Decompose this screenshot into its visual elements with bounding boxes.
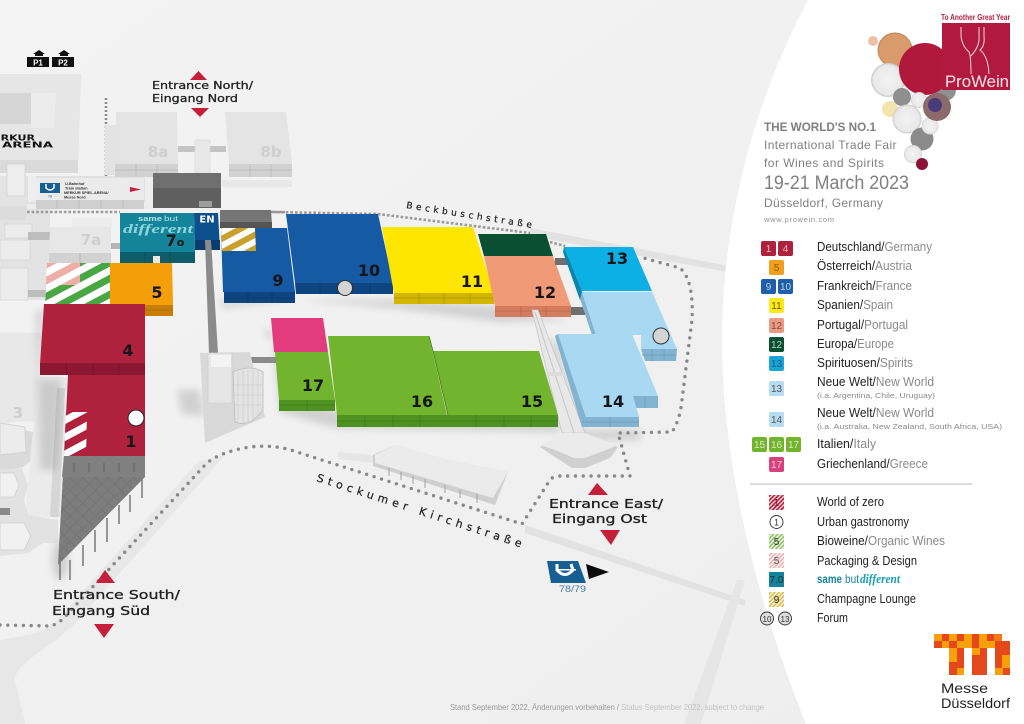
ProWein logo: ProWein — [945, 72, 1009, 91]
entrance north label: Eingang Nord — [152, 92, 238, 105]
legend row: Austria: Österreich/Austria — [817, 259, 912, 273]
canopy — [52, 456, 145, 580]
entrance south label: Entrance South/ — [53, 588, 181, 602]
legend row: World of zero: 1 — [774, 498, 780, 509]
legend row: Europe — [769, 337, 894, 352]
hall: 12 — [484, 256, 571, 317]
legend row: Portugal — [769, 318, 908, 333]
entrance east label: Eingang Ost — [552, 512, 647, 526]
street name: Stockumer Kirch strasse: Stockumer Kirchstraße — [315, 471, 524, 550]
legend row: Champagne Lounge: 9 — [774, 595, 780, 606]
hall: 8b — [225, 112, 292, 177]
dotted visitor paths — [0, 257, 692, 626]
walkway to entrance east — [532, 310, 585, 433]
legend row: New World 14: (i.a. Australia, New Zealand, South Africa, USA) — [817, 422, 1003, 431]
connector tower to hall 17 — [250, 357, 276, 363]
hall: EN — [194, 213, 220, 250]
ProWein logo: To Another Great Year — [941, 13, 1010, 22]
marker: urban gastronomy — [128, 410, 144, 426]
entrance north label: Entrance North/ — [152, 79, 253, 92]
Messe Duesseldorf logo — [934, 634, 1010, 711]
ProWein logo — [868, 13, 1010, 170]
legend row: Forum: Forum — [817, 611, 848, 625]
legend row: Austria: 5 — [774, 263, 780, 274]
champagne lounge stripes — [221, 228, 256, 251]
hall: 14 — [555, 334, 658, 427]
legend row: World of zero — [769, 495, 884, 510]
legend row: World of zero: World of zero — [817, 495, 884, 509]
legend row: Italy: Italien/Italy — [817, 437, 877, 451]
legend row: Organic wines: Bioweine/Organic Wines — [817, 534, 945, 548]
legend row: Germany: 1 — [766, 244, 772, 255]
connector from EN to tower — [205, 240, 218, 353]
hall: 11 — [382, 227, 494, 304]
hall: 17 greece — [271, 318, 328, 352]
trade fair heading: Düsseldorf, Germany — [764, 196, 883, 210]
hall: 4: 4 — [122, 341, 134, 360]
building: U-Bahn station — [27, 175, 153, 209]
legend row: same but different: different — [860, 571, 900, 586]
hall: 10: 10 — [358, 261, 380, 280]
icon: U-Bahn sign small: 78 — [48, 194, 52, 198]
entrance south label: Eingang Süd — [52, 604, 150, 618]
tower building — [200, 352, 265, 443]
legend row: France: 9 — [766, 282, 772, 293]
hall: 17: 17 — [302, 376, 324, 395]
dotted fence north — [27, 212, 565, 246]
legend row: New World 13 — [769, 375, 936, 400]
legend row: New World 13: 13 — [771, 384, 782, 395]
hall: 12: 12 — [534, 283, 556, 302]
Messe Duesseldorf logo: Düsseldorf — [941, 695, 1010, 711]
legend row: same but different: but — [845, 572, 860, 586]
hall: 10 — [286, 214, 393, 296]
legend row: New World 14 — [769, 406, 1003, 431]
roads — [0, 228, 750, 724]
legend row: Organic wines — [769, 534, 945, 549]
hall: 7.0 same but different — [120, 213, 195, 264]
parking icons: P2 — [58, 58, 68, 68]
station text: Tram station — [65, 186, 88, 190]
hall: europe — [478, 234, 553, 256]
same but different lettering: same — [138, 214, 162, 223]
building: Merkur Spiel-Arena: ARENA — [2, 140, 53, 150]
legend row: Germany: Deutschland/Germany — [817, 240, 933, 254]
legend row: same but different — [769, 571, 900, 587]
legend row: Packaging and Design: Packaging & Design — [817, 554, 917, 568]
hall: 8a — [105, 112, 178, 177]
legend row: Portugal: 12 — [771, 321, 782, 332]
legend row: Greece — [769, 457, 928, 472]
station text — [64, 182, 109, 200]
trade fair heading — [763, 120, 909, 224]
bottles — [961, 27, 989, 74]
east building — [338, 445, 508, 505]
legend row: Spirits: 13 — [771, 359, 782, 370]
legend row: Champagne Lounge: Champagne Lounge — [817, 592, 916, 606]
hall: 8b: 8b — [260, 143, 282, 161]
legend: special areas — [760, 495, 945, 625]
legend row: same but different: 7.0 — [770, 575, 784, 586]
hall 7a — [49, 218, 111, 263]
legend row: Spain — [769, 298, 893, 313]
station text: U-Bahnhof — [65, 182, 85, 186]
station text: MERKUR SPIEL-ARENA/ — [64, 191, 109, 195]
structure: walkways — [0, 164, 120, 300]
legend row: New World 13: Neue Welt/New World — [817, 375, 934, 389]
legend row: Italy: 16 — [771, 440, 782, 451]
hall: 16 — [328, 336, 448, 427]
legend row: New World 13: (i.a. Argentina, Chile, Uruguay) — [817, 391, 936, 400]
hall: 15 — [433, 351, 558, 427]
connector between 8a and 8b — [178, 140, 292, 187]
legend row: Urban gastronomy — [770, 515, 910, 529]
legend row: Urban gastronomy: Urban gastronomy — [817, 515, 910, 529]
legend row: Packaging and Design: 5 — [774, 556, 780, 567]
legend row: Europe: Europa/Europe — [817, 337, 894, 351]
legend row: Spain: Spanien/Spain — [817, 298, 893, 312]
hall: 17 — [275, 352, 335, 411]
legend row: Forum: 13 — [781, 615, 790, 624]
hall: 15: 15 — [521, 392, 543, 411]
legend row: Champagne Lounge — [769, 592, 916, 607]
marker: forum 10 — [338, 280, 352, 296]
hall: 1 — [64, 375, 145, 456]
legend row: Packaging and Design — [769, 553, 917, 568]
legend row: Italy: 15 — [754, 440, 765, 451]
same but different lettering: different — [123, 221, 194, 236]
legend row: Greece: Griechenland/Greece — [817, 457, 928, 471]
packaging and design stripes — [46, 263, 80, 285]
hall: 3: 3 — [13, 404, 23, 422]
street name: Beckbusch strasse: Beckbuschstraße — [406, 201, 533, 231]
hall: 14: 14 — [602, 392, 624, 411]
legend row: France: 10 — [780, 282, 791, 293]
legend row: France — [761, 279, 912, 294]
legend row: Spirits: Spirituosen/Spirits — [817, 356, 913, 370]
hall: 4 — [40, 304, 145, 375]
Messe Duesseldorf logo: Messe — [941, 680, 988, 696]
wine circles — [868, 33, 956, 170]
legend row: Spirits — [769, 356, 913, 371]
legend row: New World 14: 14 — [771, 415, 782, 426]
left complex: surrounding buildings — [0, 74, 565, 556]
legend row: Italy: 17 — [788, 440, 799, 451]
legend row: Europe: 12 — [771, 340, 782, 351]
hall: 13 spirits: 13 — [606, 249, 628, 268]
hall: 16: 16 — [411, 392, 433, 411]
trade fair heading: International Trade Fair — [764, 138, 897, 152]
legend row: Forum — [760, 611, 848, 625]
entrance south label — [52, 570, 181, 638]
hall: EN: EN — [199, 214, 215, 226]
legend row: Spain: 11 — [771, 301, 782, 312]
trade fair heading: for Wines and Spirits — [764, 156, 884, 170]
connectors hall 12 to 13 — [555, 258, 585, 315]
white side panel — [722, 0, 1024, 724]
legend row: Germany — [761, 240, 933, 256]
parking icons: P1 — [33, 58, 43, 68]
hall: 11: 11 — [461, 272, 483, 291]
hall: 3 — [0, 333, 43, 472]
legend row: Austria — [769, 259, 912, 275]
legend row: Portugal: Portugal/Portugal — [817, 318, 908, 332]
soft shadows under halls — [36, 300, 640, 470]
hall: 13 new world — [579, 292, 677, 361]
legend: countries — [752, 240, 1003, 472]
same but different lettering — [123, 214, 194, 236]
trade fair heading: www.prowein.com — [763, 215, 834, 224]
marker: forum 13 — [653, 328, 669, 344]
entrance east label — [549, 483, 664, 545]
entrance east label: Entrance East/ — [549, 497, 664, 511]
world of zero stripes — [64, 412, 87, 456]
red square — [942, 23, 1010, 90]
legend row: Greece: 17 — [771, 460, 782, 471]
hall: 5 — [110, 263, 173, 316]
entrance north label — [152, 71, 253, 117]
legend row: Germany: 4 — [783, 244, 789, 255]
legend divider — [750, 484, 972, 485]
icon: U-Bahn 78/79: 78/79 — [559, 584, 586, 594]
hall: 13 spirits — [563, 247, 652, 300]
hall 5 organic wines stripes — [45, 263, 110, 304]
entrance east building — [540, 433, 618, 468]
entrance north block — [153, 173, 272, 228]
arrow: red station — [130, 187, 141, 192]
icon: U-Bahn 78/79 — [547, 561, 609, 594]
hall: 7.0 same but different: 7o — [166, 231, 185, 250]
legend row: same but different: same — [817, 572, 842, 586]
building: Merkur Spiel-Arena — [0, 74, 81, 173]
legend row: Italy — [752, 437, 877, 452]
legend row: France: Frankreich/France — [817, 279, 912, 293]
hall 7a: 7a — [81, 231, 101, 249]
footnote: Stand September 2022, Änderungen vorbehalten / Status September 2022, subject to change — [450, 702, 764, 712]
hall: 1: 1 — [125, 432, 137, 451]
hall: 8a: 8a — [148, 143, 168, 161]
hall: 9 — [221, 228, 295, 303]
trade fair heading: THE WORLD'S NO.1 — [764, 120, 876, 134]
hall: 9: 9 — [272, 271, 284, 290]
same but different lettering: but — [164, 214, 179, 223]
parking icons — [27, 50, 74, 68]
legend row: Urban gastronomy: 1 — [774, 518, 779, 528]
hall: 5: 5 — [151, 283, 163, 302]
structure: courtyard — [0, 377, 67, 556]
legend row: Organic wines: 5 — [774, 537, 780, 548]
station text: Messe Nord — [64, 196, 86, 200]
trade fair heading: 19-21 March 2023 — [764, 173, 909, 194]
legend row: New World 14: Neue Welt/New World — [817, 406, 934, 420]
legend row: Forum: 10 — [763, 615, 772, 624]
